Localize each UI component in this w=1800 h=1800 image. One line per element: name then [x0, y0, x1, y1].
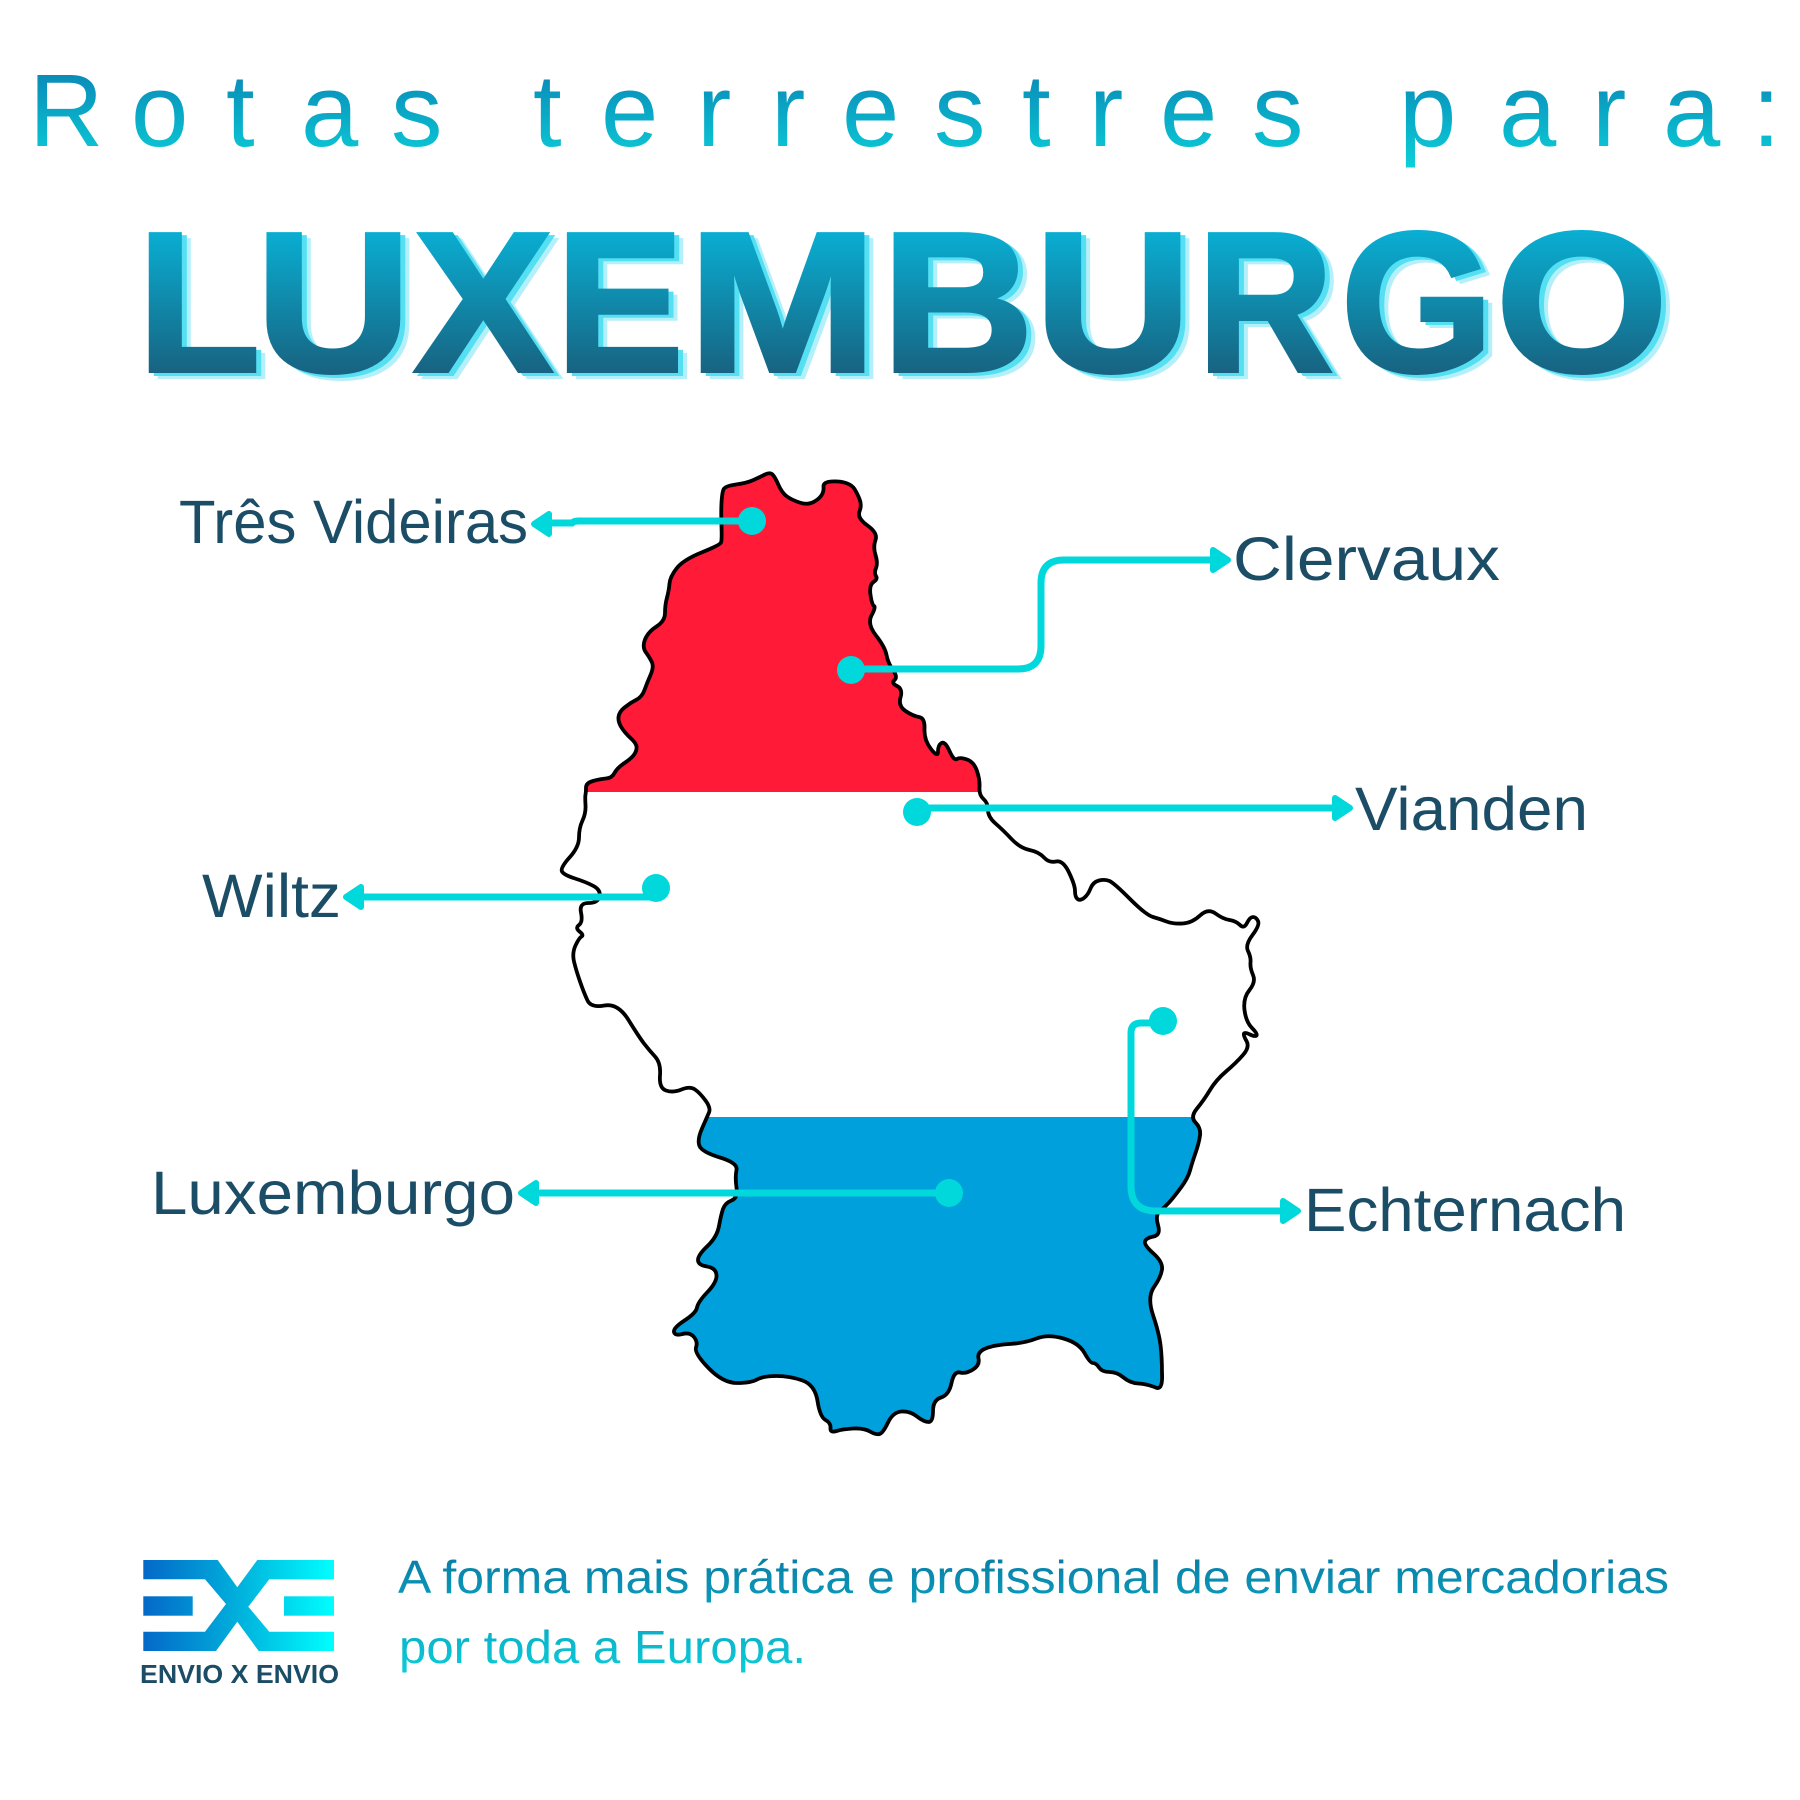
callout: Vianden	[903, 775, 1588, 843]
heading: LUXEMBURGO: R	[1206, 198, 1342, 420]
heading: LUXEMBURGO: U	[261, 195, 416, 417]
heading: LUXEMBURGO: L	[146, 198, 269, 420]
heading: LUXEMBURGO: L	[137, 192, 260, 414]
heading: LUXEMBURGO: R	[1197, 192, 1333, 414]
tagline: por toda a Europa.	[399, 1621, 806, 1673]
heading: LUXEMBURGO: U	[265, 198, 420, 420]
callout: Echternach: Echternach	[1304, 1176, 1626, 1244]
callout: Três Videiras	[179, 488, 766, 556]
title: Rotas terrestres para: Rotas terrestres para:	[29, 53, 1781, 168]
heading: LUXEMBURGO: G	[1346, 195, 1498, 417]
callout: Vianden: Vianden	[1355, 775, 1588, 843]
heading: LUXEMBURGO: E	[561, 195, 689, 417]
logo: Envio X Envio: ENVIO X ENVIO	[140, 1661, 339, 1689]
heading: LUXEMBURGO: M	[697, 198, 886, 420]
callout: Echternach	[1131, 1007, 1626, 1244]
callout: Wiltz	[202, 862, 670, 930]
callout: Luxemburgo: Luxemburgo	[151, 1159, 515, 1227]
heading: LUXEMBURGO: B	[891, 198, 1043, 420]
heading: LUXEMBURGO: E	[556, 192, 684, 414]
heading: LUXEMBURGO: O	[1496, 192, 1668, 414]
heading: LUXEMBURGO: B	[887, 195, 1039, 417]
heading: LUXEMBURGO: X	[419, 195, 557, 417]
heading: LUXEMBURGO: G	[1341, 192, 1493, 414]
callout: Três Videiras: Três Videiras	[179, 488, 528, 556]
logo: Envio X Envio	[140, 1560, 339, 1689]
heading: LUXEMBURGO: O	[1504, 198, 1677, 420]
heading: LUXEMBURGO: E	[565, 198, 693, 420]
heading: LUXEMBURGO: U	[1040, 195, 1196, 417]
map of Luxembourg in flag colours	[540, 460, 1280, 1447]
callout: Clervaux: Clervaux	[1233, 525, 1500, 593]
heading: LUXEMBURGO: X	[414, 192, 552, 414]
heading: LUXEMBURGO: U	[256, 192, 411, 414]
heading: LUXEMBURGO	[137, 192, 1677, 420]
heading: LUXEMBURGO: U	[1044, 198, 1200, 420]
heading: LUXEMBURGO: X	[423, 198, 561, 420]
tagline	[398, 1551, 1669, 1673]
tagline: A forma mais prática e profissional de enviar mercadorias	[398, 1551, 1669, 1603]
heading: LUXEMBURGO: M	[693, 195, 882, 417]
heading: LUXEMBURGO: G	[1350, 198, 1502, 420]
heading: LUXEMBURGO: M	[688, 192, 877, 414]
heading: LUXEMBURGO: U	[1035, 192, 1192, 414]
callout: Luxemburgo	[151, 1159, 963, 1227]
heading: LUXEMBURGO: L	[142, 195, 265, 417]
heading: LUXEMBURGO: R	[1202, 195, 1338, 417]
heading: LUXEMBURGO: O	[1500, 195, 1673, 417]
callout: Clervaux	[837, 525, 1500, 684]
heading: LUXEMBURGO: B	[882, 192, 1034, 414]
callout: Wiltz: Wiltz	[202, 862, 341, 930]
